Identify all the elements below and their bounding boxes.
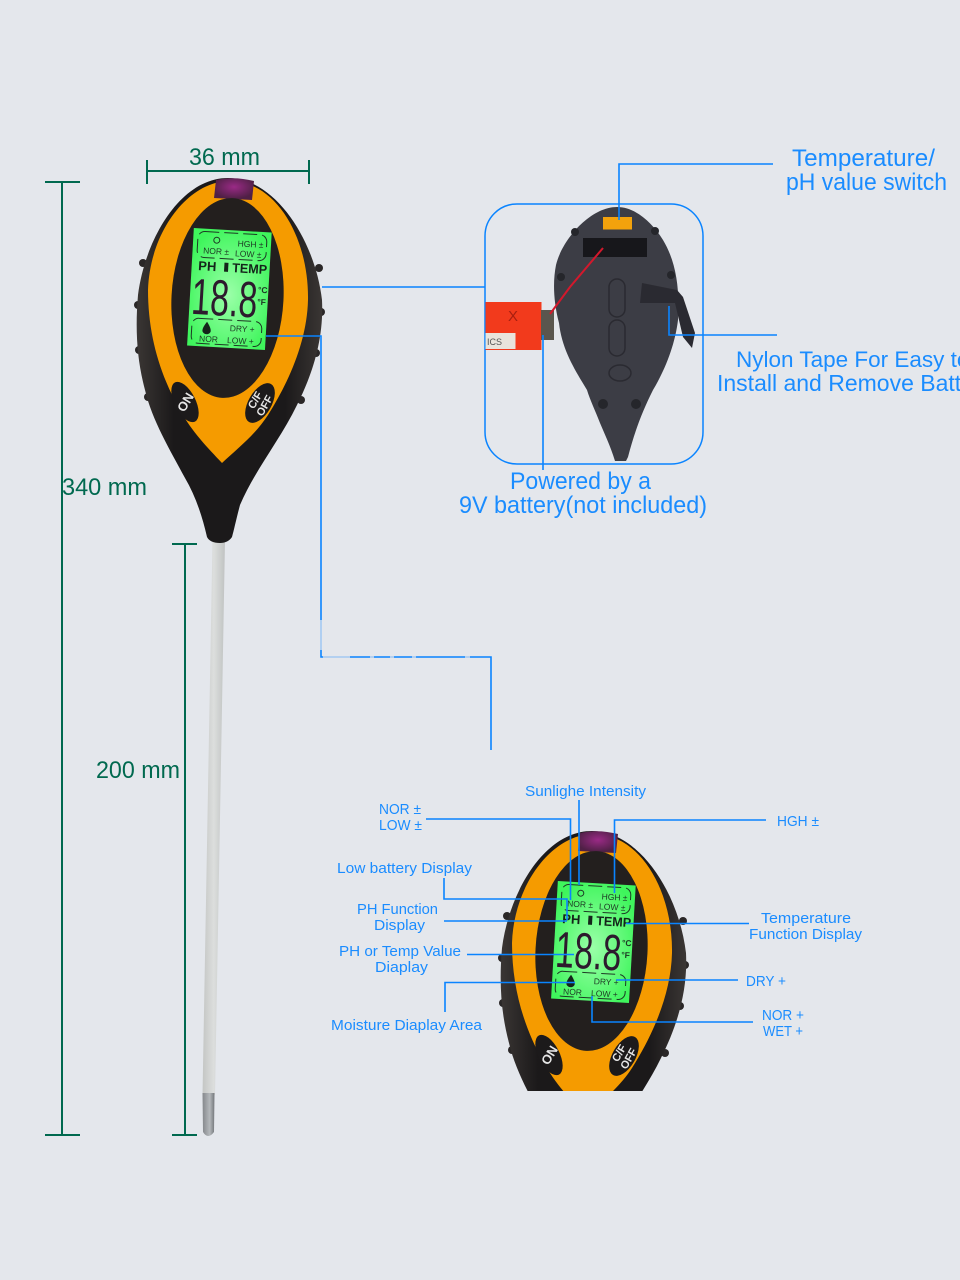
- label: Sunlight intensity: [525, 783, 646, 885]
- back slots: [609, 279, 631, 381]
- LCD screen: 18.8: [190, 268, 259, 329]
- 9V battery: X: [508, 308, 518, 325]
- LCD screen: PH: [198, 258, 217, 274]
- orange ring: [148, 181, 308, 463]
- connector line to rear view: [322, 286, 485, 288]
- callout: battery: Powered by a: [510, 468, 652, 495]
- callout: temperature / pH switch: [619, 145, 947, 220]
- temperature / pH switch: [603, 217, 632, 230]
- LCD screen: HGH ±: [237, 238, 264, 250]
- label: NOR / LOW: [379, 801, 570, 900]
- detail LCD screen: NOR: [563, 986, 582, 997]
- label: HGH: [614, 813, 819, 893]
- callout: nylon tape: [669, 306, 960, 396]
- LCD screen: NOR ±: [203, 245, 230, 257]
- dimension: 36 mm width: 36 mm: [189, 144, 260, 171]
- detail LCD screen: °F: [621, 950, 630, 960]
- detail orange ring: [512, 834, 672, 1116]
- detail C/F OFF button: OFF: [618, 1046, 640, 1072]
- callout: battery: [459, 335, 707, 519]
- detail LCD screen: TEMP: [596, 913, 632, 930]
- label: NOR / WET: [592, 996, 804, 1040]
- detail body: [500, 831, 686, 1091]
- detail LCD screen: °C: [622, 938, 632, 948]
- detail LCD screen: [551, 881, 636, 1003]
- label: Moisture display area: [331, 982, 575, 1034]
- label: Temperature function display: Function Display: [749, 926, 863, 943]
- label: PH or temp value display: Diaplay: [375, 959, 429, 976]
- LCD screen: °C: [258, 285, 268, 295]
- label: NOR / LOW: LOW ±: [379, 817, 422, 834]
- dimension: 200 mm probe: [96, 544, 197, 1135]
- detail side bumps: [498, 912, 689, 1057]
- LCD screen: TEMP: [232, 260, 268, 277]
- LCD screen: [187, 228, 272, 350]
- dimension: 36 mm width: [147, 144, 309, 184]
- ON button: ON: [174, 390, 197, 414]
- C/F OFF button: C/F: [246, 390, 265, 411]
- meter body: [137, 178, 322, 543]
- label: DRY: DRY +: [746, 973, 786, 990]
- LCD screen: LOW ±: [235, 248, 262, 260]
- label: NOR / WET: NOR +: [762, 1007, 804, 1024]
- detail C/F OFF button: C/F: [610, 1043, 629, 1064]
- body side bumps: [134, 259, 325, 404]
- label: Low battery display: Low battery Display: [337, 860, 473, 877]
- panel: rear view: [485, 204, 703, 464]
- nylon tape: [640, 283, 695, 348]
- callout: temperature / pH switch: Temperature/: [792, 145, 935, 172]
- LCD screen: DRY +: [229, 323, 255, 335]
- label: Moisture display area: Moisture Diaplay Area: [331, 1017, 483, 1034]
- meter back shell: [554, 207, 678, 461]
- probe rod: [202, 540, 225, 1136]
- label: PH or temp value display: [339, 943, 574, 976]
- panel: display detail meter: [498, 831, 689, 1091]
- LCD screen: °F: [257, 297, 266, 307]
- rounded frame: [485, 204, 703, 464]
- callout: battery: 9V battery(not included): [459, 492, 707, 519]
- 9V battery: ICS: [487, 337, 502, 347]
- label: HGH: HGH ±: [777, 813, 819, 830]
- detail LCD screen: PH: [562, 911, 581, 927]
- label: PH function display: [357, 901, 567, 934]
- detail LCD screen: LOW ±: [599, 901, 626, 913]
- LCD screen: NOR: [199, 333, 218, 344]
- detail LCD screen: DRY +: [593, 976, 619, 988]
- label: Sunlight intensity: Sunlighe Intensity: [525, 783, 646, 800]
- dimension: 340 mm length: [45, 182, 147, 1135]
- LCD screen: LOW +: [227, 335, 254, 346]
- detail LCD screen: NOR ±: [567, 898, 594, 910]
- detail dark oval: [535, 851, 648, 1051]
- label: PH function display: PH Function: [357, 901, 438, 918]
- label: Temperature function display: Temperature: [761, 910, 851, 927]
- detail ON button: ON: [538, 1043, 561, 1067]
- label: PH function display: Display: [374, 917, 426, 934]
- label: PH or temp value display: PH or Temp Value: [339, 943, 461, 960]
- detail ON button: [535, 1034, 563, 1076]
- dark display oval: [166, 195, 289, 401]
- connector line to display detail: [266, 336, 491, 750]
- dimension: 340 mm length: 340 mm: [62, 474, 147, 501]
- C/F OFF button: OFF: [255, 393, 276, 419]
- screw holes: [557, 227, 675, 409]
- 9V battery: [486, 302, 554, 350]
- detail C/F OFF button: [609, 1036, 639, 1076]
- main meter front view: [134, 178, 325, 543]
- C/F OFF button: [239, 378, 281, 428]
- dimension: 200 mm probe: 200 mm: [96, 757, 180, 784]
- detail LCD screen: 18.8: [554, 921, 623, 982]
- battery compartment: [583, 238, 647, 257]
- label: NOR / WET: WET +: [763, 1023, 803, 1040]
- label: Low battery display: [337, 860, 567, 920]
- detail LCD screen: LOW +: [591, 988, 618, 999]
- callout: temperature / pH switch: pH value switch: [786, 169, 947, 196]
- red wire: [550, 248, 603, 314]
- detail purple window: [578, 831, 618, 853]
- detail LCD screen: HGH ±: [601, 891, 628, 903]
- ON button: [164, 377, 206, 427]
- purple sensor window: [214, 178, 254, 200]
- label: Temperature function display: [626, 910, 863, 943]
- label: NOR / LOW: NOR ±: [379, 801, 421, 818]
